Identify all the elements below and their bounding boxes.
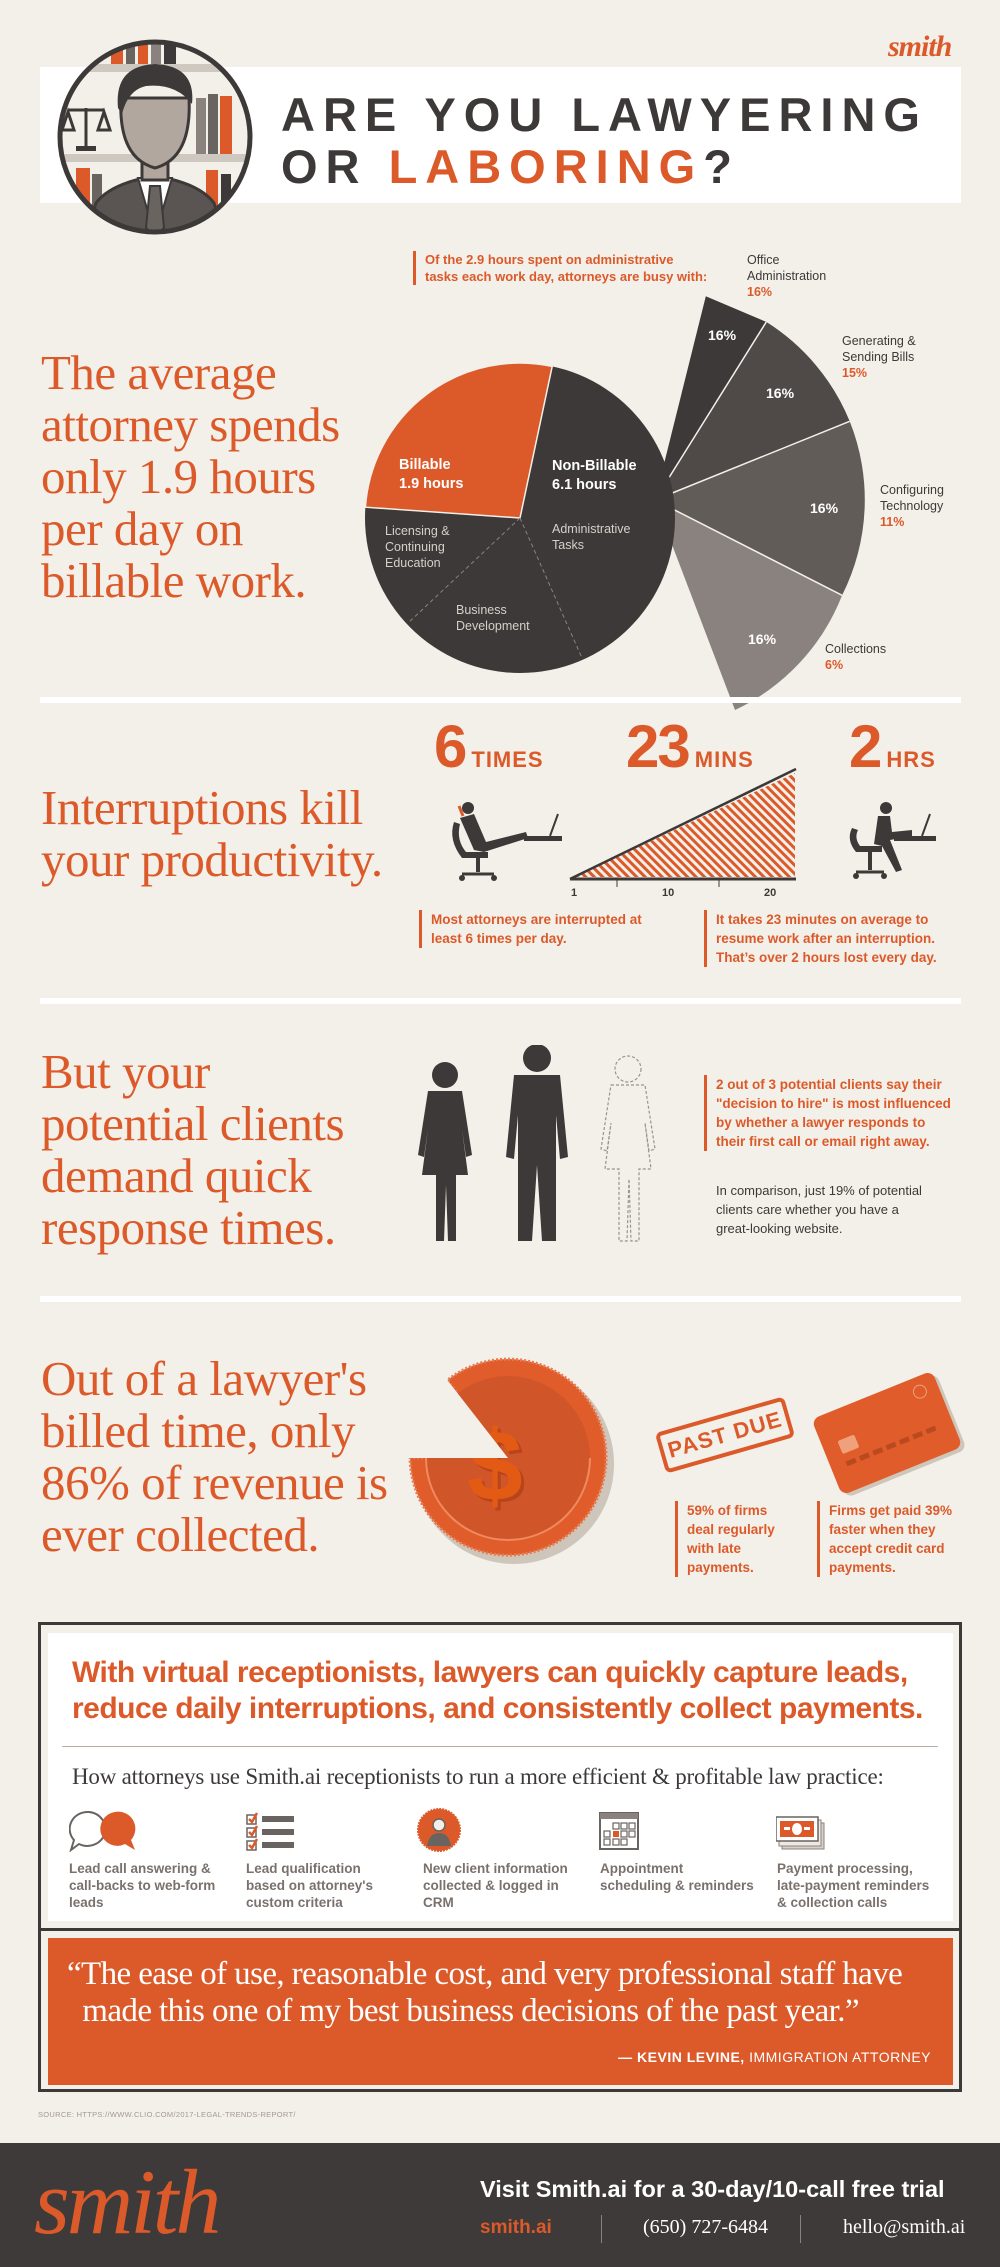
callout: credit card: payments. [829,1560,896,1575]
callout: late payments: 59% of firms [687,1503,767,1518]
callout: credit card [817,1501,952,1577]
icon: relaxing worker [452,802,562,881]
text: late-payment reminders [777,1878,929,1893]
pie labels: Billable [399,457,451,473]
text: 6% [825,658,843,672]
icon: coin: $ [467,1410,523,1522]
fan category labels [747,253,826,299]
icon: past due stamp [655,1396,795,1474]
subheading: How attorneys use Smith.ai receptionists to run a more efficient & profitable law practice: [72,1764,884,1789]
callout: interrupted 6 times: Most attorneys are interrupted at [431,912,642,927]
title text: ARE YOU LAWYERING [281,88,928,141]
icon: client badge [417,1808,461,1852]
text block: interruptions [41,780,383,887]
chart: 23 minute ramp [570,768,796,899]
contact row: smith.ai [480,2217,552,2238]
text block: average attorney: per day on [41,501,243,556]
icon: working person [850,802,936,879]
text block: average attorney: billable work. [41,553,306,608]
text block: average attorney: attorney spends [41,397,340,452]
logo: smith small: smith [888,30,951,63]
icon: calendar [599,1812,639,1850]
title text: OR LABORING? [281,140,740,193]
text block: potential clients [41,1044,344,1255]
text block: average attorney: The average [41,345,276,400]
attribution: — KEVIN LEVINE, IMMIGRATION ATTORNEY [618,2049,931,2065]
icon: money [776,1816,824,1850]
callout: late payments [675,1501,775,1577]
text block: revenue collected: billed time, only [41,1403,355,1458]
icon: three people [418,1045,656,1242]
text: Configuring [880,483,944,497]
text: Continuing [385,540,445,554]
callout: late payments: deal regularly [687,1522,775,1537]
text block: potential clients: response times. [41,1200,336,1255]
chart: 23 minute ramp: 10 [662,887,674,899]
text: collected & logged in [423,1878,559,1893]
icon: coin: $ [470,1413,526,1525]
pie labels: 1.9 hours [399,476,463,492]
text block: comparison: great-looking website. [716,1221,842,1236]
callout: 23 minutes: That’s over 2 hours lost every day. [716,950,937,965]
text: based on attorney's [246,1878,373,1893]
callout: admin note: Of the 2.9 hours spent on administrative [425,252,674,267]
icon captions: Lead call answering & [69,1861,211,1876]
callout: decision to hire: their first call or email right away. [716,1134,930,1149]
text: & collection calls [777,1895,887,1910]
panel: smith.ai services [38,1622,962,2092]
text: Tasks [552,538,584,552]
text: custom criteria [246,1895,343,1910]
callout: credit card: Firms get paid 39% [829,1503,952,1518]
icon captions: call-backs to web-form [69,1878,215,1893]
text block: average attorney: only 1.9 hours [41,449,316,504]
text block: revenue collected [41,1351,388,1562]
callout: decision to hire: by whether a lawyer responds to [716,1115,925,1130]
title band [40,67,961,203]
callout: interrupted 6 times [419,910,642,948]
text: Appointment [600,1861,683,1876]
stat: 2 hrs: 2 HRS [849,713,936,780]
stat: 6 times: 6 TIMES [434,713,544,780]
text: 11% [880,515,904,529]
source note: SOURCE: HTTPS://WWW.CLIO.COM/2017-LEGAL-TRENDS-REPORT/ [38,2110,296,2119]
footer: hello@smith.ai [843,2216,965,2238]
text: Collections [825,642,886,656]
fan category labels: Office [747,253,779,267]
footer: (650) 727-6484 [643,2216,768,2238]
heading [72,1656,923,1725]
text block: interruptions: your productivity. [41,832,383,887]
stat: 23 mins: 23 MINS [626,713,754,780]
text: Licensing & [385,524,450,538]
text: Payment processing, [777,1861,913,1876]
text block: potential clients: But your [41,1044,210,1099]
callout: decision to hire: "decision to hire" is most influenced [716,1096,951,1111]
callout: admin note [413,251,707,285]
text: 16% [766,385,794,401]
footer [0,2143,1000,2267]
text: 16% [748,631,776,647]
callout: late payments: payments. [687,1560,754,1575]
callout: credit card: accept credit card [829,1541,945,1556]
quote text: “The ease of use, reasonable cost, and very professional staff have [67,1956,902,1992]
text: Business [456,603,507,617]
text: 6.1 hours [552,477,616,493]
chart: pie and exploded fan [365,296,865,710]
icon: chat bubbles [69,1811,136,1852]
quote box [48,1938,953,2085]
text block: comparison [716,1183,922,1236]
text: Administrative [552,522,630,536]
fan percentages: 16% [708,327,736,343]
icon: coin [408,1358,614,1564]
text: Generating & [842,334,916,348]
text block: average attorney [41,345,340,608]
heading: With virtual receptionists, lawyers can quickly capture leads, [72,1656,908,1689]
quote text: made this one of my best business decisions of the past year.” [82,1993,859,2029]
text block: comparison: In comparison, just 19% of potential [716,1183,922,1198]
text: scheduling & reminders [600,1878,754,1893]
text: New client information [423,1861,568,1876]
text: Education [385,556,441,570]
quote text [67,1956,902,2029]
pie labels [399,457,463,492]
text: CRM [423,1895,454,1910]
text: Non-Billable [552,458,637,474]
callout: late payments: with late [687,1541,741,1556]
logo: smith large: smith [34,2151,218,2253]
text: Development [456,619,530,633]
text: Technology [880,499,943,513]
text: 15% [842,366,867,380]
cta: Visit Smith.ai for a 30-day/10-call free trial [480,2176,945,2202]
callout: 23 minutes: It takes 23 minutes on average to [716,912,928,927]
fan category labels: Administration [747,269,826,283]
text: Lead qualification [246,1861,361,1876]
icon: checklist [246,1812,294,1851]
chart: 23 minute ramp: 20 [764,887,776,899]
callout: decision to hire: 2 out of 3 potential clients say their [716,1077,942,1092]
icon captions: leads [69,1895,104,1910]
text: Sending Bills [842,350,914,364]
text block: interruptions: Interruptions kill [41,780,363,835]
callout: decision to hire [704,1075,951,1151]
callout: credit card: faster when they [829,1522,936,1537]
text: 16% [810,500,838,516]
text block: revenue collected: ever collected. [41,1507,319,1562]
callout: 23 minutes: resume work after an interruption. [716,931,935,946]
text block: potential clients: potential clients [41,1096,344,1151]
heading: reduce daily interruptions, and consistently collect payments. [72,1692,923,1725]
text block: revenue collected: Out of a lawyer's [41,1351,367,1406]
text block: comparison: clients care whether you have a [716,1202,899,1217]
fan category labels: 16% [747,285,772,299]
callout: admin note: tasks each work day, attorneys are busy with: [425,269,707,284]
callout: 23 minutes [704,910,937,967]
icon: past due stamp: PAST DUE [665,1406,785,1463]
text block: potential clients: demand quick [41,1148,311,1203]
text block: revenue collected: 86% of revenue is [41,1455,388,1510]
icon captions [69,1861,215,1910]
white inner box [48,1633,953,1921]
icon: credit card [811,1371,963,1495]
callout: interrupted 6 times: least 6 times per day. [431,931,567,946]
chart: 23 minute ramp: 1 [571,887,577,899]
icon: lawyer portrait [58,40,252,234]
title text [281,88,928,193]
